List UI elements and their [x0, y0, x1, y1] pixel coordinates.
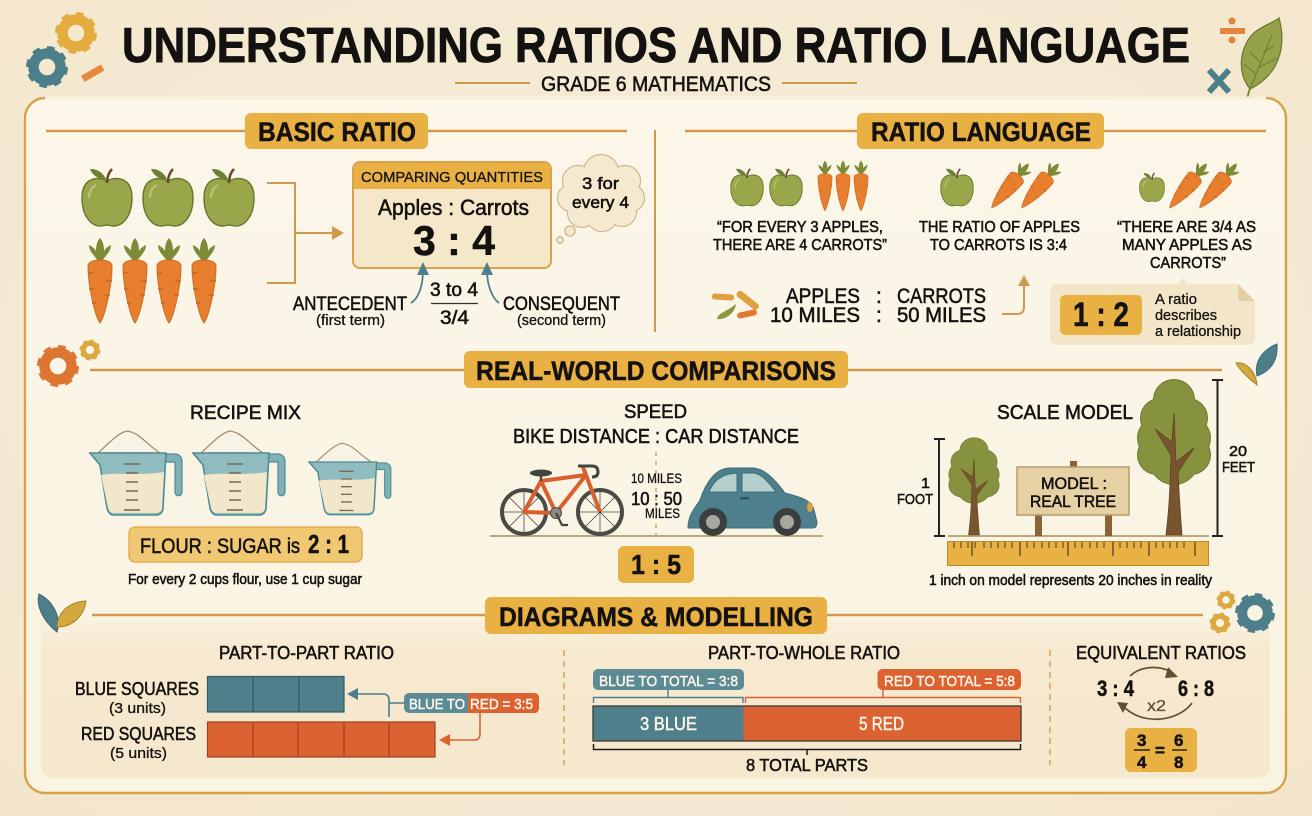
- chip: red to total: RED TO TOTAL = 5:8: [884, 673, 1015, 690]
- bar: red units: [208, 722, 435, 757]
- text: apples carrots miles table: 50 MILES: [897, 304, 986, 327]
- panel: diagrams and modelling: [38, 592, 1273, 775]
- decoration: top-left gears: [28, 14, 104, 86]
- sign: model to real tree: [1017, 461, 1129, 536]
- sub-panel: part-to-whole ratio: [593, 643, 1021, 775]
- sub-panel: equivalent ratios: 3 : 4: [1097, 676, 1135, 701]
- badge: equivalent fractions: 3: [1137, 731, 1146, 750]
- label: fraction forms: 3/4: [440, 308, 469, 329]
- sub-panel: part-to-whole ratio: PART-TO-WHOLE RATIO: [708, 643, 900, 663]
- callout: 1:2 note: 1 : 2: [1073, 296, 1129, 334]
- divider between top panels: [654, 130, 656, 332]
- label: miles between: 10 : 50: [631, 489, 682, 509]
- icon: big tree: [1138, 380, 1210, 535]
- sign: model to real tree: MODEL :: [1041, 474, 1107, 493]
- icon: sticks: [712, 290, 760, 319]
- text: apples carrots miles table: :: [876, 285, 882, 308]
- arrows: terms to ratio: [411, 262, 499, 303]
- heading: diagrams and modelling: [92, 597, 1203, 634]
- heading: basic ratio: BASIC RATIO: [258, 117, 416, 147]
- sub-panel: speed: BIKE DISTANCE : CAR DISTANCE: [513, 426, 799, 448]
- bar: part-to-whole: [593, 706, 1021, 741]
- sub-panel: recipe mix: For every 2 cups flour, use 1 cup sugar: [128, 572, 362, 588]
- badge: 1:5: 1 : 5: [631, 549, 681, 580]
- decoration: right leaves: [1236, 344, 1277, 385]
- bracket: 20 feet: 20: [1229, 443, 1247, 460]
- chip: blue to total: BLUE TO TOTAL = 3:8: [599, 673, 738, 690]
- sub-panel: recipe mix: RECIPE MIX: [190, 403, 301, 424]
- callout: 1:2 note: a relationship: [1155, 324, 1241, 340]
- label: fraction forms: 3 to 4: [430, 280, 478, 301]
- arrow: bracket to card: [267, 183, 344, 283]
- badge: 1:5: [618, 546, 694, 583]
- label: consequent: [503, 294, 620, 329]
- callout: thought cloud: [557, 155, 644, 243]
- label: blue squares: [75, 679, 199, 717]
- arrows: times two: [1117, 667, 1192, 719]
- text: ratio of statement: THE RATIO OF APPLES: [919, 219, 1080, 236]
- panel: lower diagrams background: [41, 618, 1270, 778]
- icons: ratio of example: [941, 158, 1065, 213]
- badge: flour sugar: 2 : 1: [308, 529, 349, 559]
- text: apples carrots miles table: APPLES: [786, 285, 860, 308]
- text: ratio of statement: TO CARROTS IS 3:4: [930, 237, 1067, 254]
- badge: equivalent fractions: 4: [1137, 753, 1147, 772]
- label: blue squares: BLUE SQUARES: [75, 679, 199, 699]
- label: red squares: [81, 724, 196, 762]
- callout: 1:2 note: [1050, 278, 1255, 345]
- label: consequent: CONSEQUENT: [503, 294, 620, 315]
- sub-panel: equivalent ratios: EQUIVALENT RATIOS: [1076, 643, 1246, 663]
- label: miles between: MILES: [645, 505, 680, 521]
- text: apples carrots miles table: [770, 285, 986, 327]
- icon: bicycle: [502, 466, 622, 534]
- icons: as many example: [1140, 158, 1243, 213]
- label: antecedent: (first term): [316, 313, 385, 329]
- subtitle: GRADE 6 MATHEMATICS: [541, 73, 771, 96]
- callout: 1:2 note: A ratio: [1155, 292, 1197, 308]
- bar: part-to-whole: 5 RED: [859, 714, 904, 734]
- ruler: [948, 542, 1208, 566]
- text: as many statement: “THERE ARE 3/4 AS: [1117, 219, 1256, 236]
- icons: for every example: [731, 161, 868, 211]
- card: comparing quantities: 3 : 4: [413, 217, 496, 264]
- decoration: orange gears: [40, 341, 99, 384]
- chip: blue to red: BLUE TO: [409, 696, 465, 713]
- arrows: times two: x2: [1147, 698, 1166, 715]
- label: miles between: [631, 470, 682, 521]
- badge: flour sugar: [129, 527, 362, 562]
- card: comparing quantities: [353, 162, 551, 268]
- title: UNDERSTANDING RATIOS AND RATIO LANGUAGE: [122, 19, 1190, 73]
- sub-panel: speed: SPEED: [624, 402, 687, 423]
- label: antecedent: ANTECEDENT: [293, 294, 407, 315]
- sub-panel: speed: [490, 402, 823, 583]
- label: antecedent: [293, 294, 407, 329]
- sub-panel: scale model: 1 inch on model represents 20 inches in reality: [929, 573, 1213, 589]
- panel: real-world comparisons: [40, 341, 1277, 589]
- heading: ratio language: RATIO LANGUAGE: [871, 117, 1091, 147]
- text: as many statement: [1117, 219, 1256, 272]
- label: fraction forms: [430, 280, 478, 329]
- card: comparing quantities: COMPARING QUANTITIES: [361, 169, 543, 186]
- icons: measuring cups: [90, 431, 391, 515]
- arrow: table upward: [1002, 275, 1030, 314]
- sub-panel: scale model: [897, 380, 1255, 589]
- bar: blue units: [208, 676, 344, 712]
- badge: equivalent fractions: =: [1155, 741, 1165, 760]
- card: comparing quantities: Apples : Carrots: [378, 195, 529, 220]
- label: miles between: 10 MILES: [631, 470, 682, 486]
- bar: part-to-whole: 3 BLUE: [640, 714, 697, 734]
- arrow: chip to blue bar: [347, 688, 404, 717]
- sub-panel: part-to-part ratio: [75, 643, 539, 762]
- sub-panel: scale model: SCALE MODEL: [997, 402, 1133, 424]
- text: apples carrots miles table: :: [876, 304, 882, 327]
- callout: thought cloud: 3 for: [582, 174, 619, 193]
- text: for every statement: THERE ARE 4 CARROTS”: [713, 237, 887, 254]
- text: ratio of statement: [919, 219, 1080, 254]
- bracket: 20 feet: [1212, 380, 1255, 536]
- badge: equivalent fractions: 6: [1174, 731, 1183, 750]
- label: blue squares: (3 units): [109, 700, 166, 717]
- heading: diagrams and modelling: DIAGRAMS & MODELLING: [499, 602, 813, 632]
- badge: flour sugar: FLOUR : SUGAR is: [140, 535, 300, 558]
- decoration: left leaves: [38, 594, 86, 632]
- heading: real-world comparisons: REAL-WORLD COMPARISONS: [476, 356, 836, 386]
- icon: small tree: [949, 438, 999, 535]
- label: red squares: (5 units): [110, 745, 167, 762]
- sub-panel: equivalent ratios: 6 : 8: [1178, 676, 1214, 701]
- sub-panel: recipe mix: [90, 403, 391, 588]
- text: for every statement: “FOR EVERY 3 APPLES,: [717, 219, 883, 236]
- badge: equivalent fractions: 8: [1174, 753, 1183, 772]
- bracket: 20 feet: FEET: [1222, 459, 1255, 476]
- decoration: right gears: [1211, 592, 1273, 632]
- text: as many statement: CARROTS”: [1150, 255, 1226, 272]
- bracket: 1 foot: 1: [921, 475, 930, 492]
- sub-panel: part-to-part ratio: PART-TO-PART RATIO: [219, 643, 394, 663]
- panel: basic ratio: [46, 113, 644, 329]
- icons: three apples: [82, 169, 254, 226]
- sub-panel: equivalent ratios: [1076, 643, 1246, 772]
- chip: blue to red: [404, 693, 539, 713]
- label: red squares: RED SQUARES: [81, 724, 196, 744]
- icons: four carrots: [88, 238, 216, 323]
- bracket: 1 foot: [897, 439, 945, 536]
- chip: blue to red: RED = 3:5: [470, 696, 533, 713]
- icon: car: [688, 468, 817, 536]
- sub-panel: part-to-whole ratio: 8 TOTAL PARTS: [746, 755, 868, 775]
- label: consequent: (second term): [517, 313, 606, 329]
- text: apples carrots miles table: CARROTS: [897, 285, 986, 308]
- decoration: top-right math symbols and leaf: [1209, 18, 1282, 99]
- text: for every statement: [713, 219, 887, 254]
- bracket: 1 foot: FOOT: [897, 491, 933, 508]
- callout: thought cloud: every 4: [572, 193, 629, 212]
- badge: equivalent fractions: [1125, 728, 1197, 772]
- text: as many statement: MANY APPLES AS: [1122, 237, 1252, 254]
- text: apples carrots miles table: 10 MILES: [770, 304, 860, 327]
- arrow: chip to red bar: [439, 713, 480, 746]
- heading: real-world comparisons: [90, 351, 1222, 388]
- panel: ratio language: [685, 113, 1266, 345]
- sign: model to real tree: REAL TREE: [1030, 492, 1116, 511]
- callout: 1:2 note: describes: [1155, 308, 1217, 324]
